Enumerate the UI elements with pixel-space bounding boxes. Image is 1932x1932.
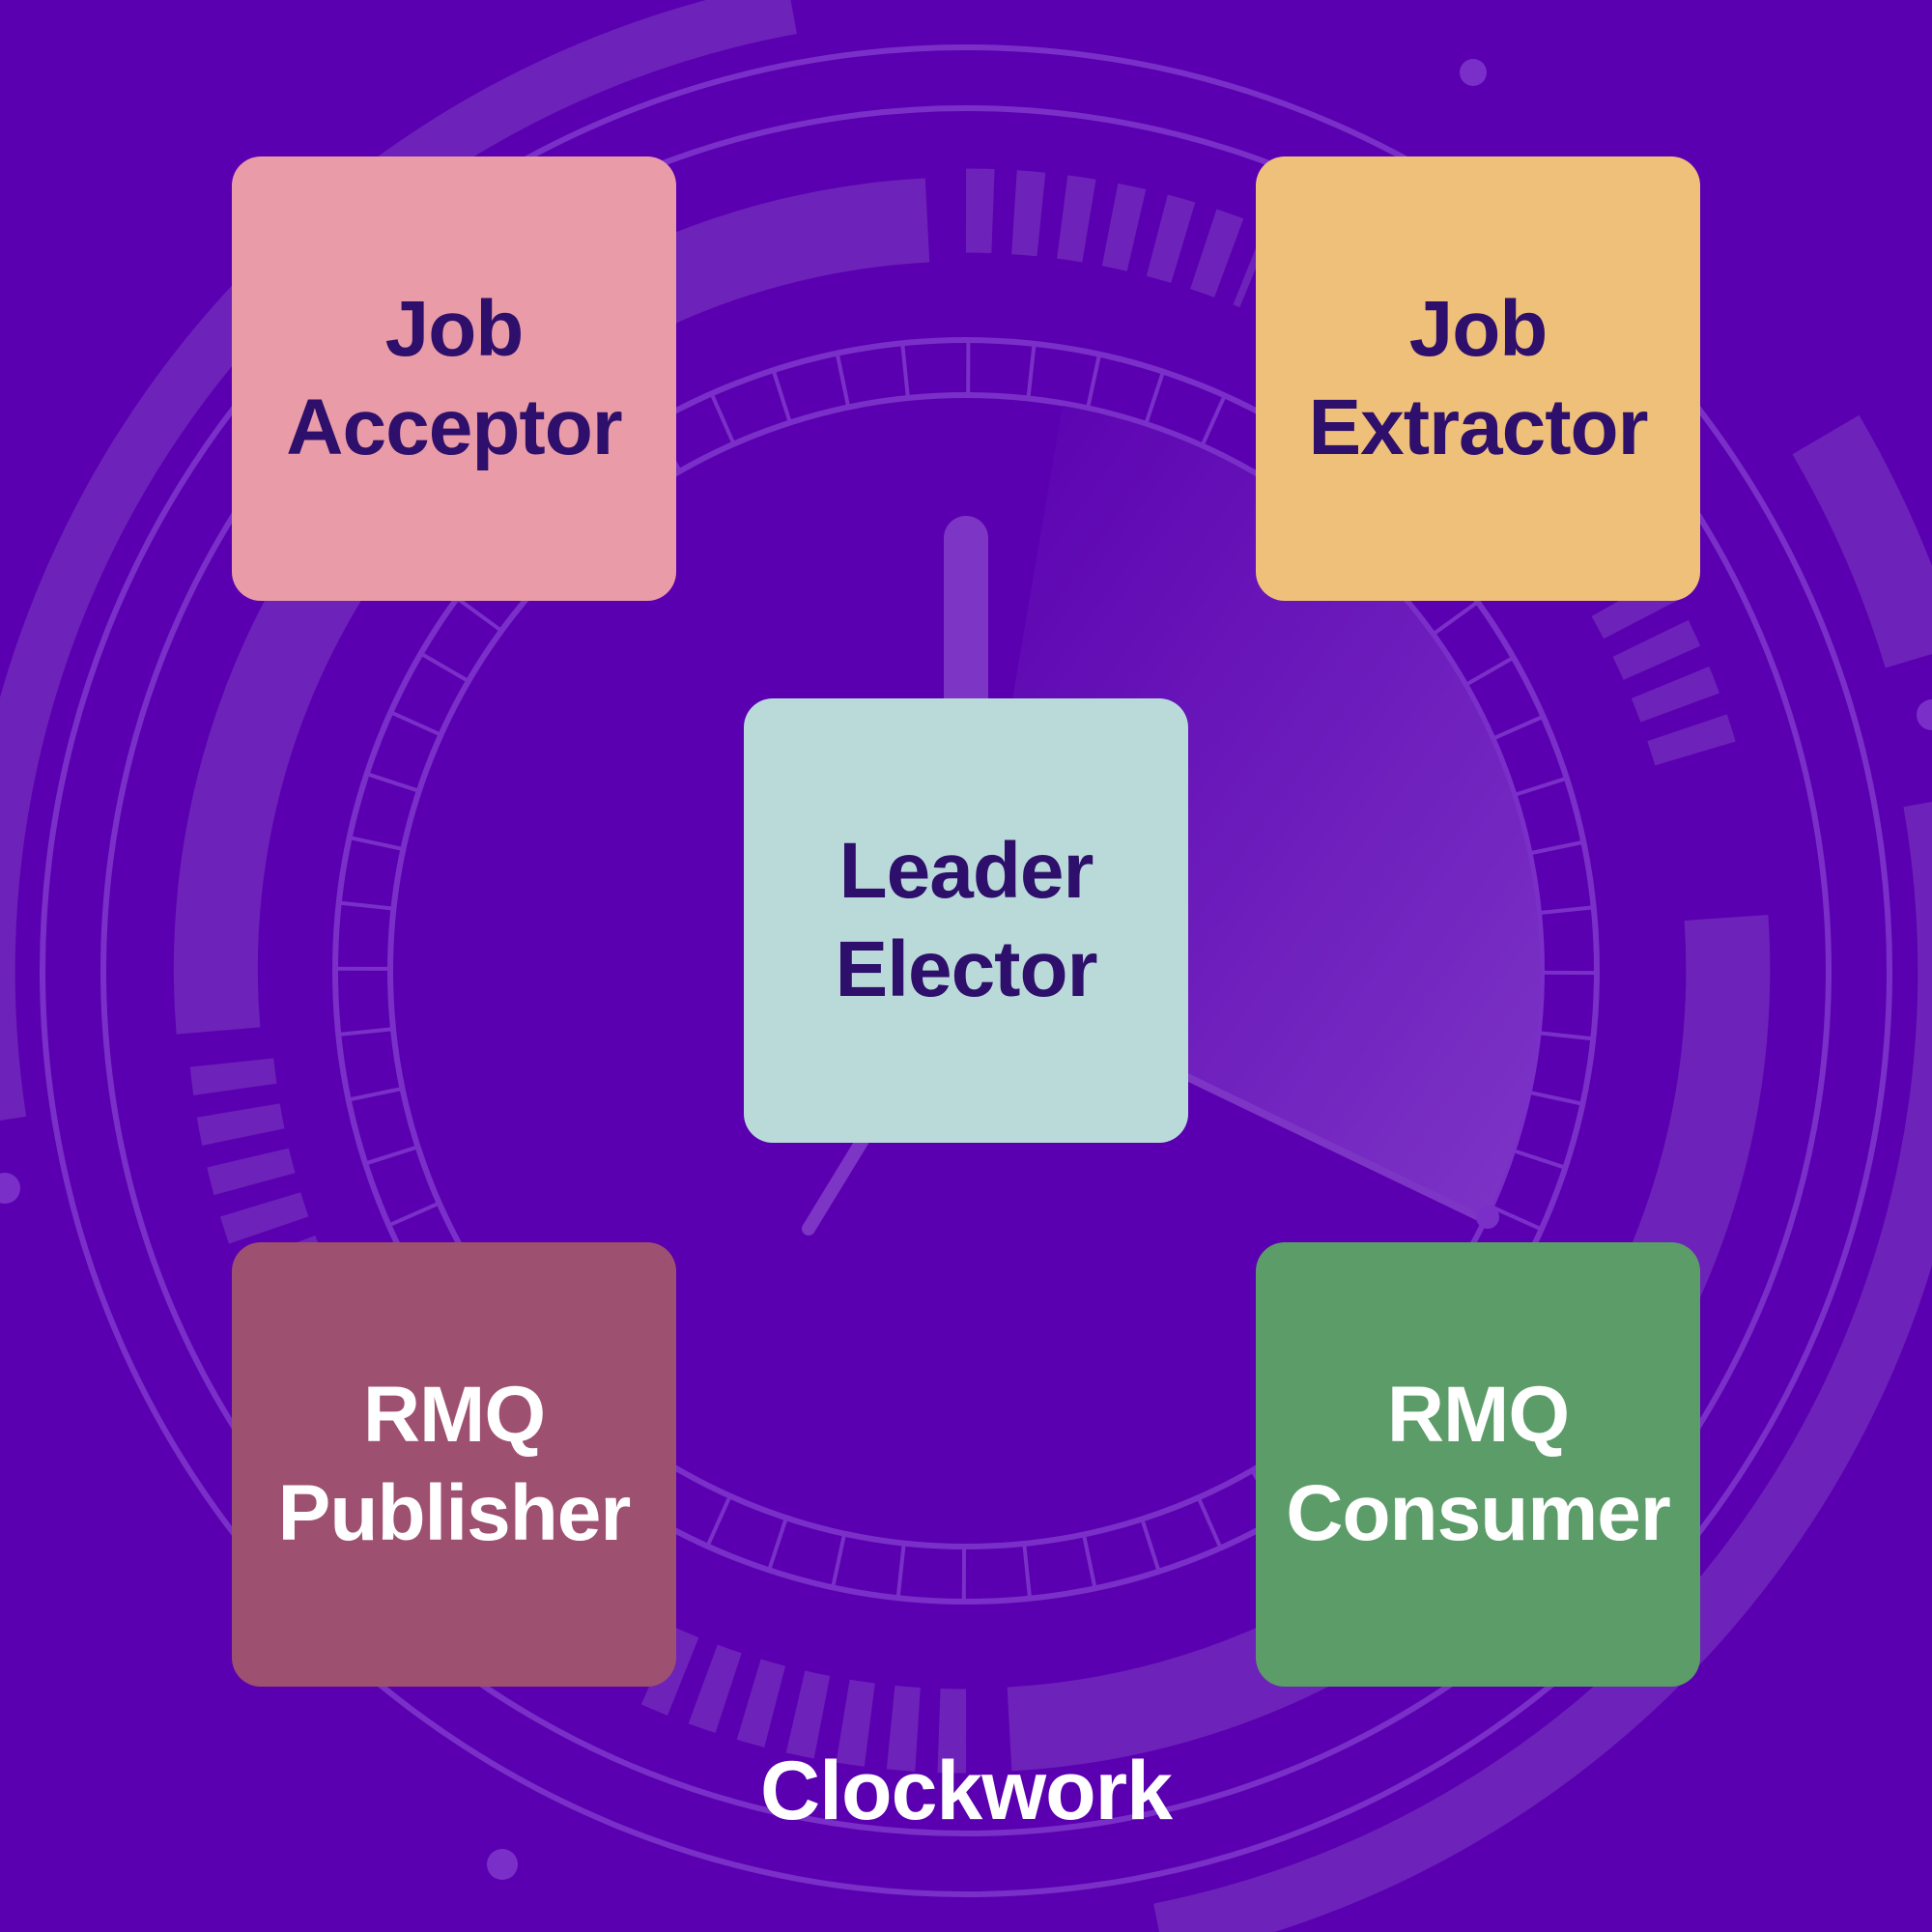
box: RMQ Consumer: Consumer [1286,1469,1670,1557]
box: RMQ Consumer: RMQ [1387,1371,1569,1459]
box: RMQ Publisher [232,1242,676,1687]
title: Clockwork: Clockwork [760,1745,1172,1837]
box: RMQ Consumer [1256,1242,1700,1687]
box: Leader Elector: Elector [835,925,1097,1013]
box: Leader Elector [744,698,1188,1143]
box: Job Acceptor [232,156,676,601]
box: RMQ Publisher: RMQ [363,1371,545,1459]
box: Job Extractor: Job [1409,285,1547,373]
box: Job Extractor: Extractor [1308,384,1648,471]
box: Job Acceptor: Job [385,285,523,373]
box: Leader Elector: Leader [839,827,1093,915]
box: Job Acceptor: Acceptor [286,384,622,471]
box: RMQ Publisher: Publisher [278,1469,630,1557]
box: Job Extractor [1256,156,1700,601]
